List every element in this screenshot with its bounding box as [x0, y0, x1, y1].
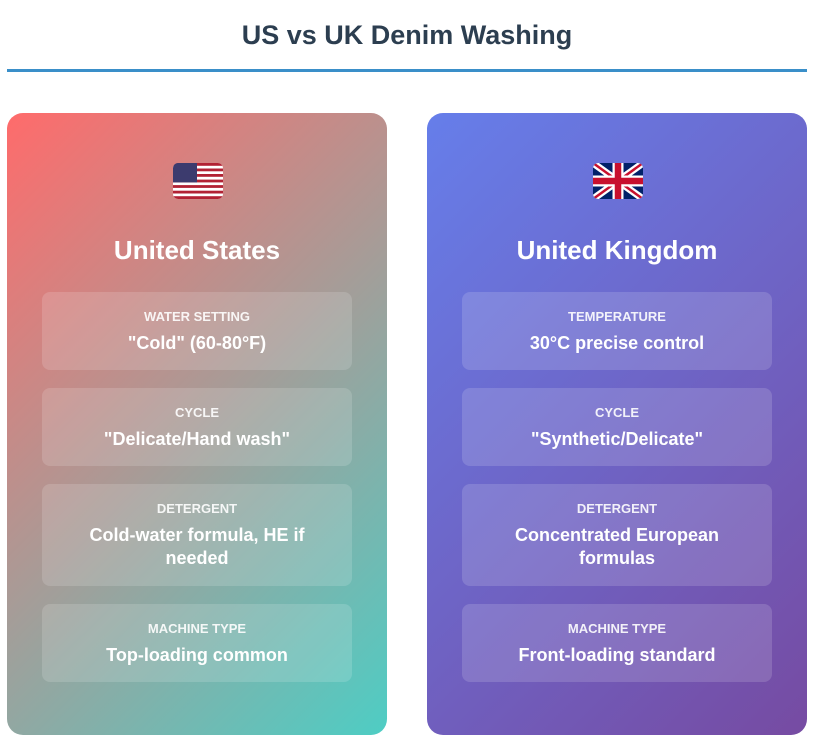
card: machine type: MACHINE TYPE: [148, 621, 246, 636]
card: temperature: TEMPERATURE: [568, 309, 666, 324]
card: cycle: "Synthetic/Delicate": [531, 429, 703, 449]
heading: United Kingdom: [517, 235, 717, 265]
card: detergent: Cold-water formula, HE if needed: [89, 525, 304, 568]
card: cycle: CYCLE: [175, 405, 219, 420]
panel: united kingdom: [427, 113, 807, 735]
icon: US flag: [173, 163, 223, 199]
card: detergent: DETERGENT: [157, 501, 237, 516]
card: water setting: [42, 292, 352, 370]
card: cycle: CYCLE: [595, 405, 639, 420]
card: cycle: "Delicate/Hand wash": [104, 429, 290, 449]
heading: United States: [114, 235, 280, 265]
card: detergent: DETERGENT: [577, 501, 657, 516]
icon: UK flag: [593, 163, 643, 199]
card: detergent: [462, 484, 772, 586]
card: temperature: 30°C precise control: [530, 333, 704, 353]
card: machine type: [42, 604, 352, 682]
card: water setting: "Cold" (60-80°F): [128, 333, 266, 353]
card: cycle: [42, 388, 352, 466]
card: temperature: [462, 292, 772, 370]
card: machine type: Top-loading common: [106, 645, 288, 665]
card: machine type: MACHINE TYPE: [568, 621, 666, 636]
title: US vs UK Denim Washing: [242, 20, 572, 50]
card: detergent: Concentrated European formulas: [515, 525, 719, 568]
card: detergent: [42, 484, 352, 586]
card: machine type: Front-loading standard: [518, 645, 716, 665]
card: water setting: WATER SETTING: [144, 309, 250, 324]
card: cycle: [462, 388, 772, 466]
panel: united states: [7, 113, 387, 735]
card: machine type: [462, 604, 772, 682]
